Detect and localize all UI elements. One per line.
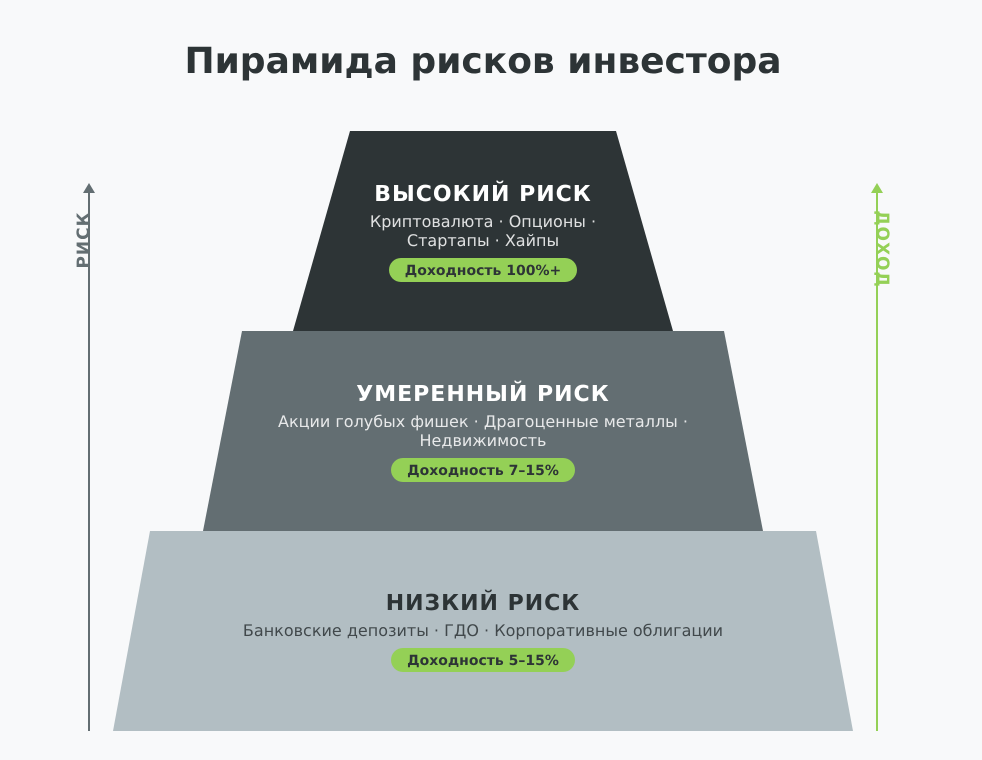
moderate risk yield badge xyxy=(391,458,575,482)
low risk yield badge xyxy=(391,648,575,672)
high risk heading: ВЫСОКИЙ РИСК xyxy=(374,180,592,207)
income arrow xyxy=(871,183,892,731)
low risk examples: Банковские депозиты · ГДО · Корпоративные облигации xyxy=(243,621,723,640)
moderate risk examples: Недвижимость xyxy=(420,431,546,450)
high risk examples: Стартапы · Хайпы xyxy=(407,231,559,250)
risk arrow xyxy=(74,183,95,731)
panel: moderate risk tier xyxy=(203,331,763,531)
high risk yield badge: Доходность 100%+ xyxy=(405,263,561,279)
high risk yield badge xyxy=(389,258,577,282)
panel: high risk tier xyxy=(293,131,673,331)
moderate risk yield badge: Доходность 7–15% xyxy=(407,463,559,479)
title: Пирамида рисков инвестора xyxy=(184,41,782,82)
risk arrow: РИСК xyxy=(74,211,94,269)
low risk heading: НИЗКИЙ РИСК xyxy=(386,589,580,616)
panel: low risk tier xyxy=(113,531,853,731)
high risk examples: Криптовалюта · Опционы · xyxy=(370,212,596,231)
low risk yield badge: Доходность 5–15% xyxy=(407,653,559,669)
moderate risk heading: УМЕРЕННЫЙ РИСК xyxy=(356,380,610,407)
income arrow: ДОХОД xyxy=(872,210,892,288)
moderate risk examples: Акции голубых фишек · Драгоценные металлы · xyxy=(278,412,688,431)
